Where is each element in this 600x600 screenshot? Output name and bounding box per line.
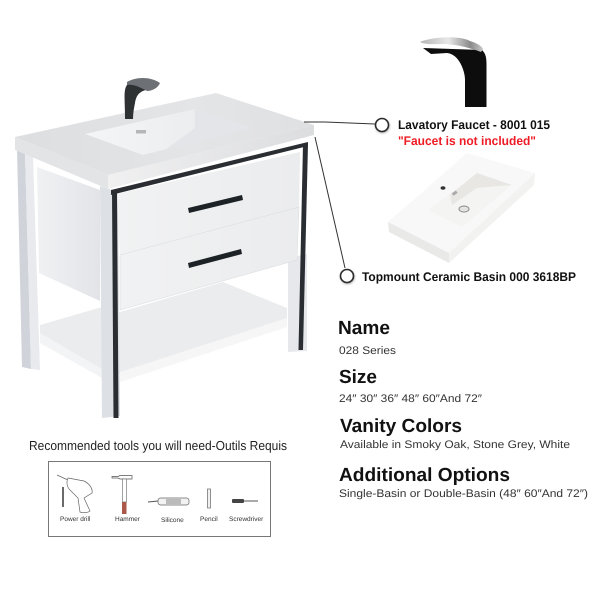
lower handle: [188, 249, 242, 268]
marker: [340, 270, 354, 284]
leader line: [304, 122, 375, 124]
spec: vanity colors: Vanity Colors: [340, 416, 462, 437]
spec: name: [338, 318, 397, 357]
icon: hammer: [112, 476, 132, 514]
right front leg: [288, 254, 307, 352]
overflow: [136, 130, 146, 134]
tool labels: Silicone: [161, 517, 184, 524]
tool labels: [60, 516, 264, 524]
lower shelf: [40, 282, 287, 382]
upper drawer: [117, 152, 300, 255]
small faucet: [125, 78, 160, 119]
vanity illustration: [15, 78, 314, 418]
spec: name: 028 Series: [339, 345, 397, 357]
countertop: [15, 93, 314, 189]
faucet label: Lavatory Faucet - 8001 015: [398, 118, 550, 132]
faucet callout: [304, 118, 550, 148]
spec: additional options: Additional Options: [339, 465, 510, 486]
spec: size: 24″ 30″ 36″ 48″ 60″And 72″: [339, 393, 482, 405]
basin bowl: [85, 109, 252, 155]
upper handle: [188, 195, 243, 213]
side panel: [37, 167, 100, 301]
basin callout: [315, 137, 576, 284]
icon: pencil: [208, 489, 210, 508]
lower drawer: [120, 207, 299, 310]
spec: vanity colors: [340, 416, 570, 451]
black frame: [111, 142, 308, 418]
tools panel: [48, 462, 270, 536]
leader line: [315, 137, 345, 268]
faucet product image: [420, 37, 486, 107]
spec: name: Name: [338, 318, 390, 339]
faucet note: "Faucet is not included": [398, 134, 536, 148]
spec: additional options: [339, 465, 588, 500]
front left leg: [100, 186, 120, 418]
spec: additional options: Single-Basin or Double-Basin (48″ 60″And 72″): [339, 488, 588, 500]
back left leg: [17, 150, 40, 370]
icon: screwdriver: [232, 499, 258, 503]
basin label: Topmount Ceramic Basin 000 3618BP: [362, 270, 576, 284]
icon: silicone tube: [148, 498, 189, 505]
tools heading: Recommended tools you will need-Outils Requis: [29, 438, 287, 453]
tool labels: Screwdriver: [229, 516, 264, 523]
marker: [376, 118, 390, 133]
spec: size: [339, 367, 482, 405]
basin product image: [388, 153, 535, 263]
spec: vanity colors: Available in Smoky Oak, Stone Grey, White: [340, 439, 570, 451]
tool labels: Power drill: [60, 516, 91, 523]
icon: power drill: [57, 475, 92, 513]
tool labels: Hammer: [115, 516, 141, 523]
spec: size: Size: [339, 367, 377, 388]
tool labels: Pencil: [200, 516, 218, 523]
